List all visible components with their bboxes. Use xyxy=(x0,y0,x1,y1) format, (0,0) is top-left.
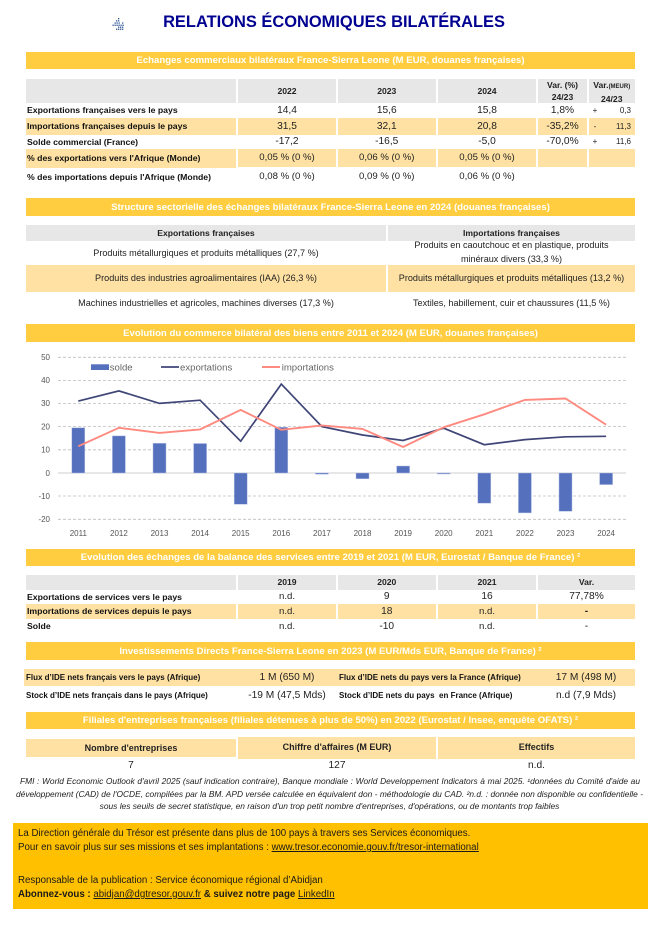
column headers: Exportations françaises xyxy=(157,228,255,238)
row: importations: 11,3 xyxy=(616,122,631,131)
row: solde: 11,6 xyxy=(616,137,631,146)
legend: solde xyxy=(110,362,133,374)
y axis labels: -10 xyxy=(38,492,51,501)
header row: Chiffre d'affaires (M EUR) xyxy=(283,742,391,752)
heading: échanges commerciaux xyxy=(26,52,635,69)
row: importations: Importations françaises depuis le pays xyxy=(27,121,187,131)
sector row 3 xyxy=(78,298,610,308)
row: importations xyxy=(26,118,635,135)
x axis labels: 2014 xyxy=(191,529,210,538)
x axis labels: 2016 xyxy=(272,529,291,538)
panel: sectoral structure table xyxy=(26,225,635,308)
table header row: 2022 xyxy=(277,86,297,96)
sector row 1: minéraux divers (33,3 %) xyxy=(461,254,562,264)
row: exportations xyxy=(27,105,631,116)
bars: solde xyxy=(72,427,613,513)
heading: filiales d'entreprises xyxy=(26,712,635,729)
row: flux d'IDE xyxy=(24,669,635,686)
value row xyxy=(128,760,545,771)
sector row 3: Machines industrielles et agricoles, machines diverses (17,3 %) xyxy=(78,298,334,308)
x axis labels xyxy=(70,529,616,538)
row: solde des services: n.d. xyxy=(479,621,495,632)
row: exportations de services: 77,78% xyxy=(569,591,604,602)
y axis labels xyxy=(38,353,51,524)
row: exportations de services xyxy=(27,591,604,602)
row: part des importations: 0,09 % (0 %) xyxy=(359,171,414,182)
legend: importations xyxy=(282,362,334,374)
table header row: 24/23 xyxy=(601,94,622,104)
x axis labels: 2022 xyxy=(516,529,534,538)
legend xyxy=(91,362,334,374)
heading: évolution du commerce xyxy=(26,324,635,342)
panel: table of bilateral trade xyxy=(26,79,635,182)
header row xyxy=(26,737,635,759)
x axis labels: 2019 xyxy=(394,529,413,538)
row: importations: - xyxy=(594,122,596,131)
row: exportations de services: n.d. xyxy=(279,591,295,602)
x axis labels: 2021 xyxy=(475,529,494,538)
panel: subsidiaries table xyxy=(26,737,635,771)
row: exportations: 1,8% xyxy=(551,105,574,116)
header row xyxy=(26,575,635,590)
row: exportations: 14,4 xyxy=(277,105,297,116)
y axis labels: 50 xyxy=(41,353,51,362)
row: solde: Solde commercial (France) xyxy=(27,137,138,147)
column headers: Importations françaises xyxy=(463,228,560,238)
row: importations de services: 18 xyxy=(381,606,392,617)
table header row: Var.(MEUR) xyxy=(593,80,630,90)
row: flux d'IDE: 17 M (498 M) xyxy=(556,672,616,683)
sector row 3: Textiles, habillement, cuir et chaussures (11,5 %) xyxy=(413,298,610,308)
line: importations xyxy=(78,398,606,447)
panel: contact box xyxy=(13,823,648,909)
header row: 2019 xyxy=(277,577,297,587)
row: part des exportations: 0,05 % (0 %) xyxy=(259,152,315,163)
text block: sources and notes xyxy=(16,776,643,811)
header row: Nombre d'entreprises xyxy=(85,743,177,753)
panel: FDI table xyxy=(24,669,635,701)
heading: évolution du commerce: Evolution du commerce bilatéral des biens entre 2011 et 2024 (M EUR, douanes françaises) xyxy=(123,328,538,339)
heading: échanges commerciaux: Echanges commerciaux bilatéraux France-Sierra Leone (M EUR, douanes françaises) xyxy=(136,55,525,66)
text: subscribe: Abonnez-vous : abidjan@dgtresor.gouv.fr & suivez notre page LinkedIn xyxy=(18,889,335,900)
line: exportations xyxy=(78,384,606,445)
x axis labels: 2020 xyxy=(435,529,453,538)
text block: sources and notes: développement (CAD) de l'OCDE, compilées par la BM. APD versée calculée en équivalent don - méthodologie du CAD. ²n.d. : donnée non disponible ou confidentielle - xyxy=(16,789,643,799)
header row: 2021 xyxy=(477,577,497,587)
header row: Effectifs xyxy=(519,742,554,752)
row: part des importations xyxy=(27,171,515,182)
row: exportations de services: 16 xyxy=(481,591,493,602)
panel: services table xyxy=(26,575,635,632)
row: part des importations: 0,06 % (0 %) xyxy=(459,171,515,182)
sector row 1: Produits métallurgiques et produits métalliques (27,7 %) xyxy=(93,248,319,258)
row: part des importations: 0,08 % (0 %) xyxy=(259,171,315,182)
heading: filiales d'entreprises: Filiales d'entreprises françaises (filiales détenues à plus de 50%) en 2022 (Eurostat / Insee, enquête OFATS) ² xyxy=(83,715,578,726)
row: part des exportations: 0,06 % (0 %) xyxy=(359,152,414,163)
row: stock d'IDE: -19 M (47,5 Mds) xyxy=(248,690,326,701)
chart: bilateral goods trade 2011-2024 xyxy=(38,353,626,538)
row: stock d'IDE: Stock d’IDE nets français dans le pays (Afrique) xyxy=(26,691,208,700)
row: exportations de services: 9 xyxy=(384,591,390,602)
row: exportations: 15,6 xyxy=(377,105,397,116)
x axis labels: 2017 xyxy=(313,529,331,538)
header row: Var. xyxy=(579,577,594,587)
heading: balance des services: Evolution des échanges de la balance des services entre 2019 et 2021 (M EUR, Eurostat / Banque de France) ² xyxy=(81,552,580,563)
x axis labels: 2024 xyxy=(597,529,616,538)
row: importations: 20,8 xyxy=(477,121,497,132)
title: RELATIONS ÉCONOMIQUES BILATÉRALES xyxy=(163,13,505,31)
row: exportations: 15,8 xyxy=(477,105,497,116)
row: part des exportations: % des exportations vers l'Afrique (Monde) xyxy=(27,153,200,163)
legend: exportations xyxy=(180,362,232,374)
x axis labels: 2013 xyxy=(151,529,169,538)
row: solde: + xyxy=(593,137,597,146)
row: solde des services: - xyxy=(585,621,588,632)
row: importations de services: n.d. xyxy=(479,606,495,617)
y axis labels: 40 xyxy=(41,376,51,385)
row: solde: -17,2 xyxy=(275,136,299,147)
table header row: 2024 xyxy=(477,86,497,96)
text: publication manager: Responsable de la publication : Service économique régional d’Abidjan xyxy=(18,875,323,886)
row: stock d'IDE xyxy=(26,690,616,701)
row: stock d'IDE: Stock d’IDE nets du pays en France (Afrique) xyxy=(339,691,512,700)
value row: 7 xyxy=(128,760,134,771)
row: part des exportations xyxy=(26,149,635,168)
value row: n.d. xyxy=(528,760,545,771)
sector row 2: Produits des industries agroalimentaires (IAA) (26,3 %) xyxy=(95,273,317,283)
row: importations de services: Importations de services depuis le pays xyxy=(27,606,192,616)
sector row 1: Produits en caoutchouc et en plastique, produits xyxy=(414,240,609,250)
row: importations de services: n.d. xyxy=(279,606,295,617)
x axis labels: 2018 xyxy=(354,529,372,538)
row: solde des services xyxy=(27,621,588,632)
row: exportations: 0,3 xyxy=(620,106,631,115)
row: flux d'IDE: Flux d’IDE nets français vers le pays (Afrique) xyxy=(26,673,200,682)
sector row 2: Produits métallurgiques et produits métalliques (13,2 %) xyxy=(399,273,624,283)
row: solde: -70,0% xyxy=(546,136,579,147)
row: solde des services: -10 xyxy=(379,621,394,632)
x axis labels: 2015 xyxy=(232,529,250,538)
y axis labels: 10 xyxy=(41,446,51,454)
row: importations de services xyxy=(26,604,635,619)
row: importations de services: - xyxy=(585,606,588,617)
row: flux d'IDE: 1 M (650 M) xyxy=(260,672,314,683)
table header row: Var. (%) xyxy=(547,80,578,90)
row: part des exportations: 0,05 % (0 %) xyxy=(459,152,515,163)
row: solde: -5,0 xyxy=(478,136,496,147)
row: importations: 32,1 xyxy=(377,121,397,132)
sector row 2 xyxy=(26,265,635,292)
header row: 2020 xyxy=(377,577,396,587)
x axis labels: 2012 xyxy=(110,529,128,538)
icon: Trésor dotted logo xyxy=(112,18,124,30)
row: stock d'IDE: n.d (7,9 Mds) xyxy=(556,690,616,701)
row: importations: -35,2% xyxy=(546,121,579,132)
y axis labels: 0 xyxy=(46,469,51,478)
row: importations: 31,5 xyxy=(277,121,297,132)
y axis labels: 20 xyxy=(41,422,51,432)
row: flux d'IDE: Flux d’IDE nets du pays vers la France (Afrique) xyxy=(339,673,521,682)
y axis labels: 30 xyxy=(41,399,51,408)
sector row 1 xyxy=(93,240,609,264)
table header row xyxy=(26,79,635,104)
table header row: 24/23 xyxy=(552,92,573,102)
table header row: 2023 xyxy=(377,86,396,96)
y axis labels: -20 xyxy=(38,515,51,524)
heading: structure sectorielle xyxy=(26,198,635,216)
text block: sources and notes: FMI : World Economic Outlook d'avril 2025 (sauf indication contraire), Banque mondiale : World Developpement Indicators à mai 2025. ¹données du Comité d'aide au xyxy=(20,776,640,786)
x axis labels: 2023 xyxy=(557,529,575,538)
row: solde xyxy=(27,136,631,147)
row: solde des services: Solde xyxy=(27,621,51,631)
text block: sources and notes: sous les seuils de secret statistique, en raison d'un trop petit nombre d'entreprises, d'opérations, ou de montants trop faibles xyxy=(100,801,559,811)
row: exportations de services: Exportations de services vers le pays xyxy=(27,592,182,602)
row: solde des services: n.d. xyxy=(279,621,295,632)
heading: structure sectorielle: Structure sectorielle des échanges bilatéraux France-Sierra Leone en 2024 (douanes françaises) xyxy=(111,202,550,213)
row: exportations: Exportations françaises vers le pays xyxy=(27,105,178,115)
row: solde: -16,5 xyxy=(375,136,398,147)
x axis labels: 2011 xyxy=(70,529,87,538)
row: part des importations: % des importations depuis l'Afrique (Monde) xyxy=(27,172,211,182)
text: link to missions: Pour en savoir plus sur ses missions et ses implantations : www.tresor.economie.gouv.fr/tresor-international xyxy=(18,842,479,853)
heading: balance des services xyxy=(26,549,635,566)
row: exportations: + xyxy=(593,106,597,115)
heading: investissements directs: Investissements Directs France-Sierra Leone en 2023 (M EUR/Mds EUR, Banque de France) ² xyxy=(119,646,542,657)
heading: investissements directs xyxy=(26,642,635,660)
text: presence: La Direction générale du Trésor est présente dans plus de 100 pays à travers ses Services économiques. xyxy=(18,828,470,839)
column headers xyxy=(26,225,635,241)
value row: 127 xyxy=(328,760,346,771)
